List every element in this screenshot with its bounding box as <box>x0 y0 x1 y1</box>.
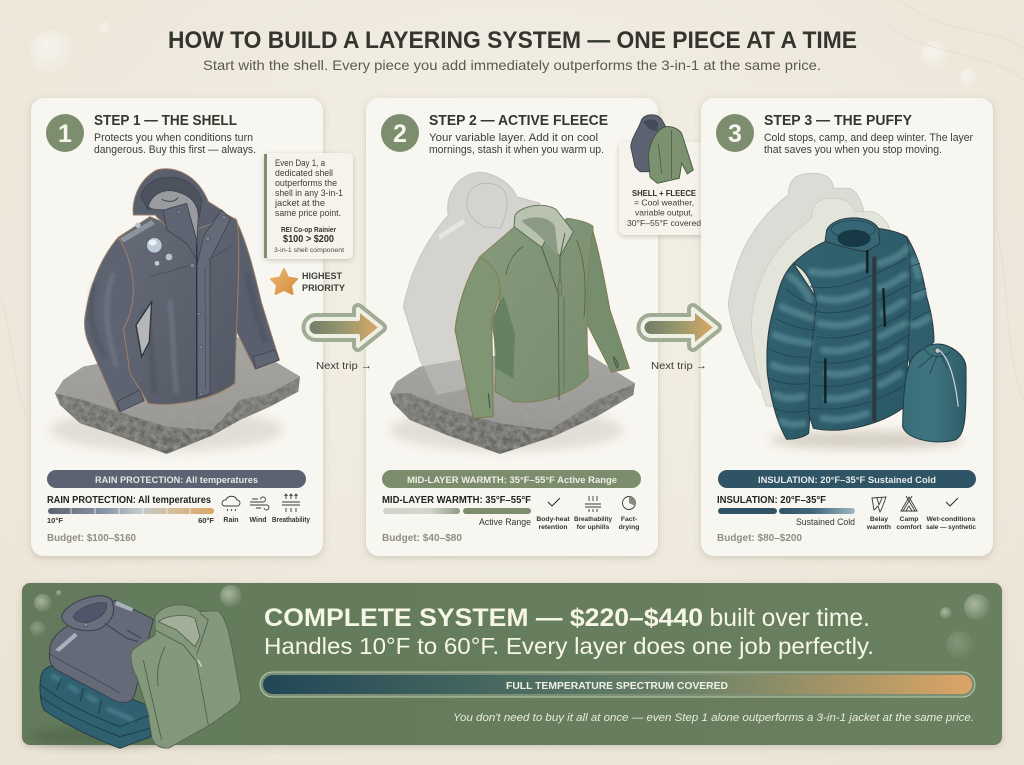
icon: wind <box>249 497 269 524</box>
icon: breathability: Breathability <box>272 517 310 524</box>
icon: star <box>271 269 297 294</box>
budget: step 2: Budget: $40–$80 <box>382 533 462 544</box>
icon: rain <box>222 496 240 524</box>
icon: rain: Rain <box>223 517 239 524</box>
icon: wet-conditions <box>926 498 976 531</box>
text: complete system headline: Handles 10°F to 60°F. Every layer does one job perfectly. <box>264 633 874 659</box>
callout: dedicated shell: shell in any 3-in-1 <box>275 188 343 199</box>
icon: wind: Wind <box>249 517 267 524</box>
icon: belay warmth <box>866 497 891 531</box>
callout: dedicated shell <box>264 153 353 259</box>
pill: rain protection <box>47 470 306 488</box>
heading: step 3: STEP 3 — THE PUFFY <box>764 113 912 129</box>
description: step 1: Protects you when conditions turn <box>94 132 253 144</box>
icon: breathability <box>272 494 310 524</box>
callout: dedicated shell: same price point. <box>275 208 341 219</box>
callout: dedicated shell: REI Co-op Rainier <box>281 227 336 234</box>
icon: wet-conditions: Wet-conditions <box>927 516 976 523</box>
panel: step 3 the puffy <box>701 98 993 556</box>
heading: step 1: STEP 1 — THE SHELL <box>94 113 237 129</box>
description: step 2: mornings, stash it when you warm up. <box>429 144 604 156</box>
temperature bar: rain protection: 60°F <box>198 516 214 525</box>
temperature bar: insulation: INSULATION: 20°F–35°F <box>717 495 826 506</box>
pill: rain protection: RAIN PROTECTION: All temperatures <box>95 475 258 486</box>
icon: fact-drying: Fact- <box>621 516 637 523</box>
heading: step 2: STEP 2 — ACTIVE FLEECE <box>429 113 608 129</box>
callout: dedicated shell: Even Day 1, a <box>275 158 326 169</box>
step number 1 <box>46 114 84 152</box>
step number 3: 3 <box>728 120 742 148</box>
temperature bar: rain protection <box>47 495 214 525</box>
description: step 1 <box>94 132 256 156</box>
text: complete system headline: built over time. <box>710 604 870 632</box>
icon: camp comfort: Camp <box>900 516 918 523</box>
panel: step 2 active fleece <box>366 98 710 556</box>
description: step 3 <box>764 132 973 156</box>
label: highest priority <box>302 271 346 294</box>
callout: dedicated shell: jacket at the <box>274 198 325 209</box>
bar: full temperature spectrum: FULL TEMPERATURE SPECTRUM COVERED <box>506 680 728 692</box>
step number 2: 2 <box>393 120 407 148</box>
callout: dedicated shell: outperforms the <box>275 178 337 189</box>
illustration: fleece on rock with ghost shell <box>390 172 635 454</box>
callout: shell plus fleece: 30°F–55°F covered <box>627 218 701 228</box>
icon: mini shell and fleece <box>631 115 693 183</box>
temperature bar: rain protection: RAIN PROTECTION: All temperatures <box>47 495 211 506</box>
label: highest priority: PRIORITY <box>302 283 346 294</box>
icon: body-heat retention <box>536 498 570 531</box>
budget: step 3: Budget: $80–$200 <box>717 533 802 544</box>
pill: mid-layer warmth <box>382 470 641 488</box>
text: complete system headline: COMPLETE SYSTEM — $220–$440 <box>264 604 703 632</box>
panel: complete system banner <box>22 583 1002 748</box>
description: step 3: Cold stops, camp, and deep winter. The layer <box>764 132 973 144</box>
callout: dedicated shell: $100 > $200 <box>283 234 334 245</box>
callout: shell plus fleece <box>619 115 710 235</box>
label: next trip 1: Next trip → <box>316 360 372 372</box>
note: buy over time: You don't need to buy it all at once — even Step 1 alone outperforms a 3-in-1 jacket at the same price. <box>453 712 974 724</box>
arrow: step 1 to step 2 <box>308 309 381 346</box>
icon: body-heat retention: retention <box>538 524 568 531</box>
step number 1: 1 <box>58 120 72 148</box>
temperature bar: mid-layer: Active Range <box>479 517 531 528</box>
temperature bar: insulation: Sustained Cold <box>796 517 855 528</box>
icon: belay warmth: Belay <box>870 516 888 523</box>
callout: shell plus fleece: = Cool weather, <box>634 198 694 208</box>
arrow: step 2 to step 3 <box>642 309 716 346</box>
panel: step 1 the shell <box>31 98 353 556</box>
icon: fact-drying: drying <box>619 524 639 531</box>
bar: full temperature spectrum <box>260 672 975 697</box>
icon: wet-conditions: sale — synthetic <box>926 524 976 531</box>
icon: body-heat retention: Body-heat <box>536 516 570 523</box>
budget: step 1: Budget: $100–$160 <box>47 533 136 544</box>
temperature bar: mid-layer <box>382 495 531 528</box>
label: highest priority: HIGHEST <box>302 271 342 282</box>
icon: breathability for uphills: for uphills <box>577 524 610 531</box>
label: next trip 2: Next trip → <box>651 360 707 372</box>
callout: dedicated shell: 3-in-1 shell component <box>274 247 344 254</box>
icon: fact-drying <box>619 496 639 531</box>
pill: mid-layer warmth: MID-LAYER WARMTH: 35°F–55°F Active Range <box>407 475 617 486</box>
step number 3 <box>716 114 754 152</box>
pill: insulation <box>718 470 976 488</box>
step number 2 <box>381 114 419 152</box>
callout: shell plus fleece: SHELL + FLEECE <box>632 188 696 198</box>
callout: dedicated shell: dedicated shell <box>275 168 333 179</box>
icon: breathability for uphills: Breathability <box>574 516 612 523</box>
illustration: puffy jacket with stuff sack <box>728 173 966 449</box>
icon: breathability for uphills <box>574 496 612 531</box>
subtitle: Start with the shell. Every piece you add immediately outperforms the 3-in-1 at the same price. <box>203 57 821 73</box>
temperature bar: insulation <box>717 495 855 528</box>
temperature bar: rain protection: 10°F <box>47 516 63 525</box>
description: step 3: that saves you when you stop moving. <box>764 144 942 156</box>
illustration: folded layers stack <box>30 596 241 748</box>
text: complete system headline <box>264 604 874 659</box>
icon: camp comfort <box>896 496 922 531</box>
callout: shell plus fleece: variable output, <box>635 208 693 218</box>
description: step 2 <box>429 132 604 156</box>
title: HOW TO BUILD A LAYERING SYSTEM — ONE PIECE AT A TIME <box>168 27 857 54</box>
illustration: shell jacket on rock <box>50 169 300 454</box>
icon: camp comfort: comfort <box>896 524 922 531</box>
description: step 1: dangerous. Buy this first — always. <box>94 144 256 156</box>
description: step 2: Your variable layer. Add it on cool <box>429 132 598 144</box>
temperature bar: mid-layer: MID-LAYER WARMTH: 35°F–55°F <box>382 495 531 506</box>
pill: insulation: INSULATION: 20°F–35°F Sustained Cold <box>758 475 936 486</box>
icon: belay warmth: warmth <box>866 524 891 531</box>
